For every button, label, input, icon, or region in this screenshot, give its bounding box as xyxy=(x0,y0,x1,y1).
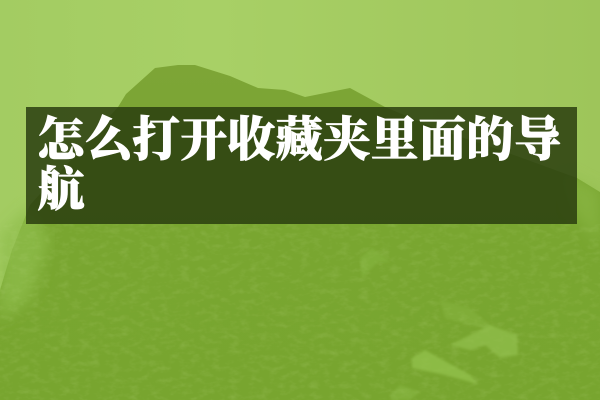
title: 怎么打开收藏夹里面的导航 xyxy=(37,115,562,217)
title panel xyxy=(26,107,577,224)
